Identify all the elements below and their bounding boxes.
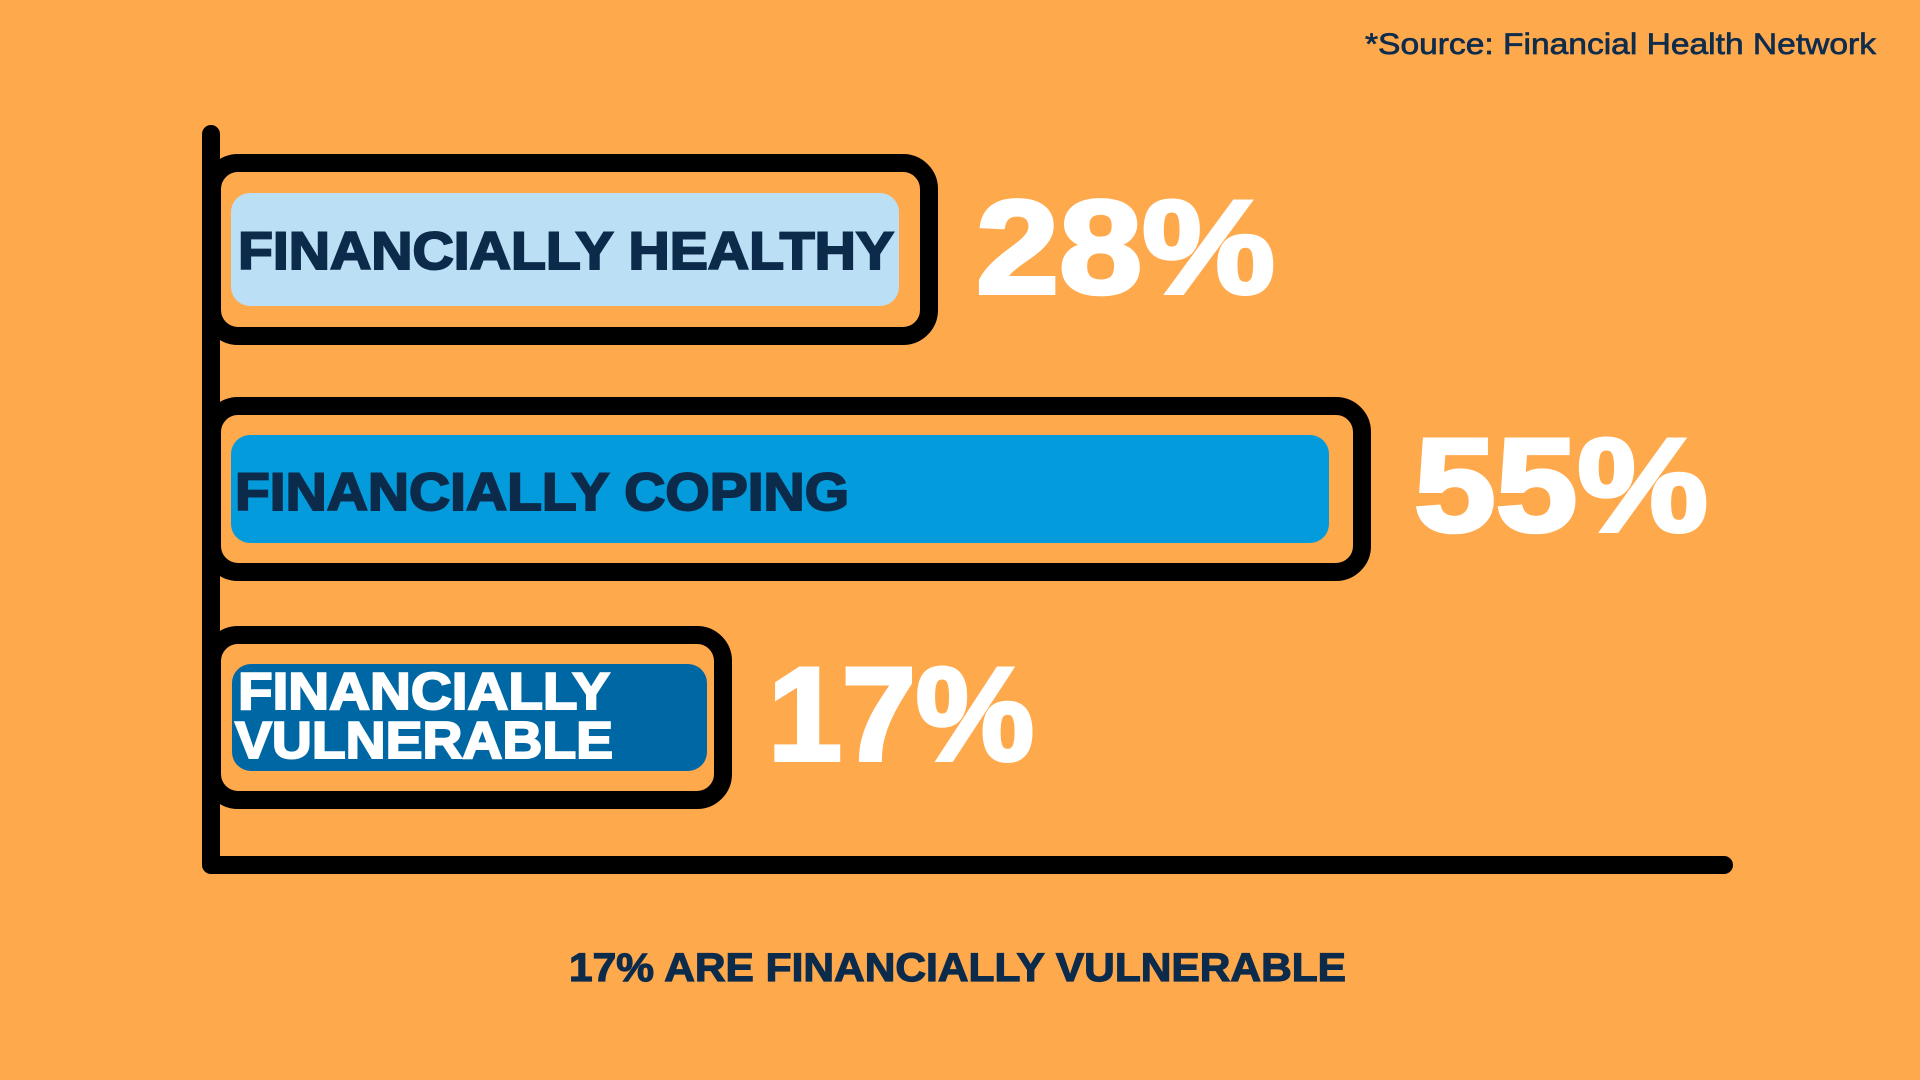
bar fill [232, 664, 707, 771]
chart axes [211, 134, 1724, 865]
bar label: FINANCIALLY COPING [235, 463, 849, 522]
bar: financially healthy 28% [212, 163, 1275, 336]
bar label [235, 663, 613, 770]
label line 1: FINANCIALLY [238, 663, 610, 721]
bar fill [231, 193, 899, 306]
label line 2: VULNERABLE [235, 712, 613, 770]
bar outline [212, 406, 1362, 572]
bar outline [212, 163, 929, 336]
source note: *Source: Financial Health Network [1365, 28, 1877, 61]
bar label: FINANCIALLY HEALTHY [238, 222, 894, 281]
bar outline [212, 635, 723, 800]
bar: financially coping 55% [212, 406, 1708, 572]
bar fill [231, 435, 1329, 543]
caption: 17% ARE FINANCIALLY VULNERABLE [569, 946, 1346, 990]
value: 55% [1414, 412, 1708, 560]
value: 17% [768, 641, 1034, 789]
bar: financially vulnerable 17% [212, 635, 1034, 800]
value: 28% [976, 174, 1275, 322]
